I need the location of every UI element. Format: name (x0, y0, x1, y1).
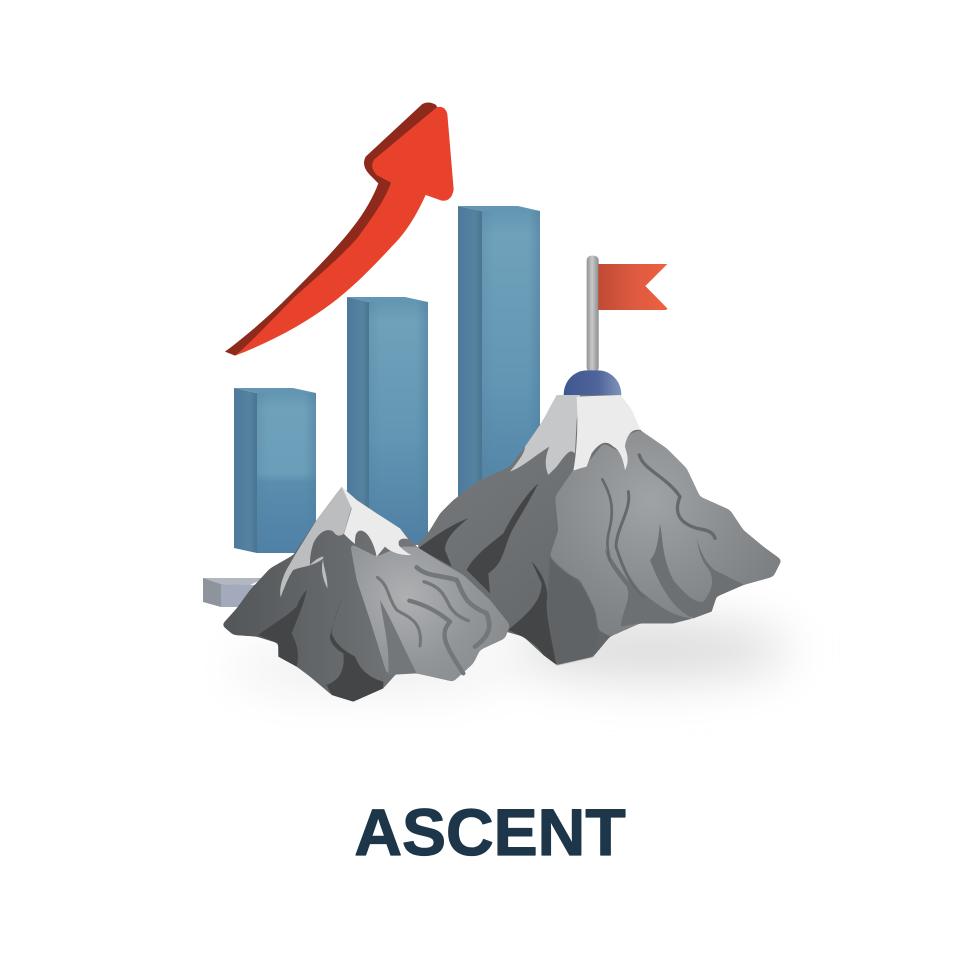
rock cracks (377, 567, 489, 673)
rock shade band (380, 600, 417, 675)
flag pole (587, 256, 599, 372)
dark crevices (258, 580, 383, 702)
mid shade at base (548, 557, 598, 665)
small mountain (222, 487, 510, 702)
dark crevices (418, 483, 557, 665)
bar 2 (347, 297, 428, 545)
rock shade bands (605, 523, 743, 627)
bar 3 (458, 206, 540, 520)
arrow side face (225, 102, 442, 356)
base plate (203, 578, 265, 607)
flag (598, 264, 667, 310)
snow shaded side (510, 395, 580, 475)
bar chart (234, 206, 540, 553)
rock cracks (602, 455, 715, 597)
bar 1 (234, 388, 316, 553)
large mountain with flag (417, 256, 782, 665)
summit dome (564, 370, 621, 395)
snow cap (342, 487, 412, 557)
ground shadow (230, 620, 790, 688)
title: ASCENT (354, 795, 626, 869)
mountain silhouette (222, 487, 510, 702)
snow shaded side (280, 487, 352, 597)
mountain lit face (350, 543, 510, 682)
mountain lit face (550, 430, 782, 637)
snow cap (573, 395, 641, 471)
mountain silhouette (417, 395, 782, 665)
arrow front face (235, 107, 454, 356)
growth arrow (225, 102, 454, 356)
